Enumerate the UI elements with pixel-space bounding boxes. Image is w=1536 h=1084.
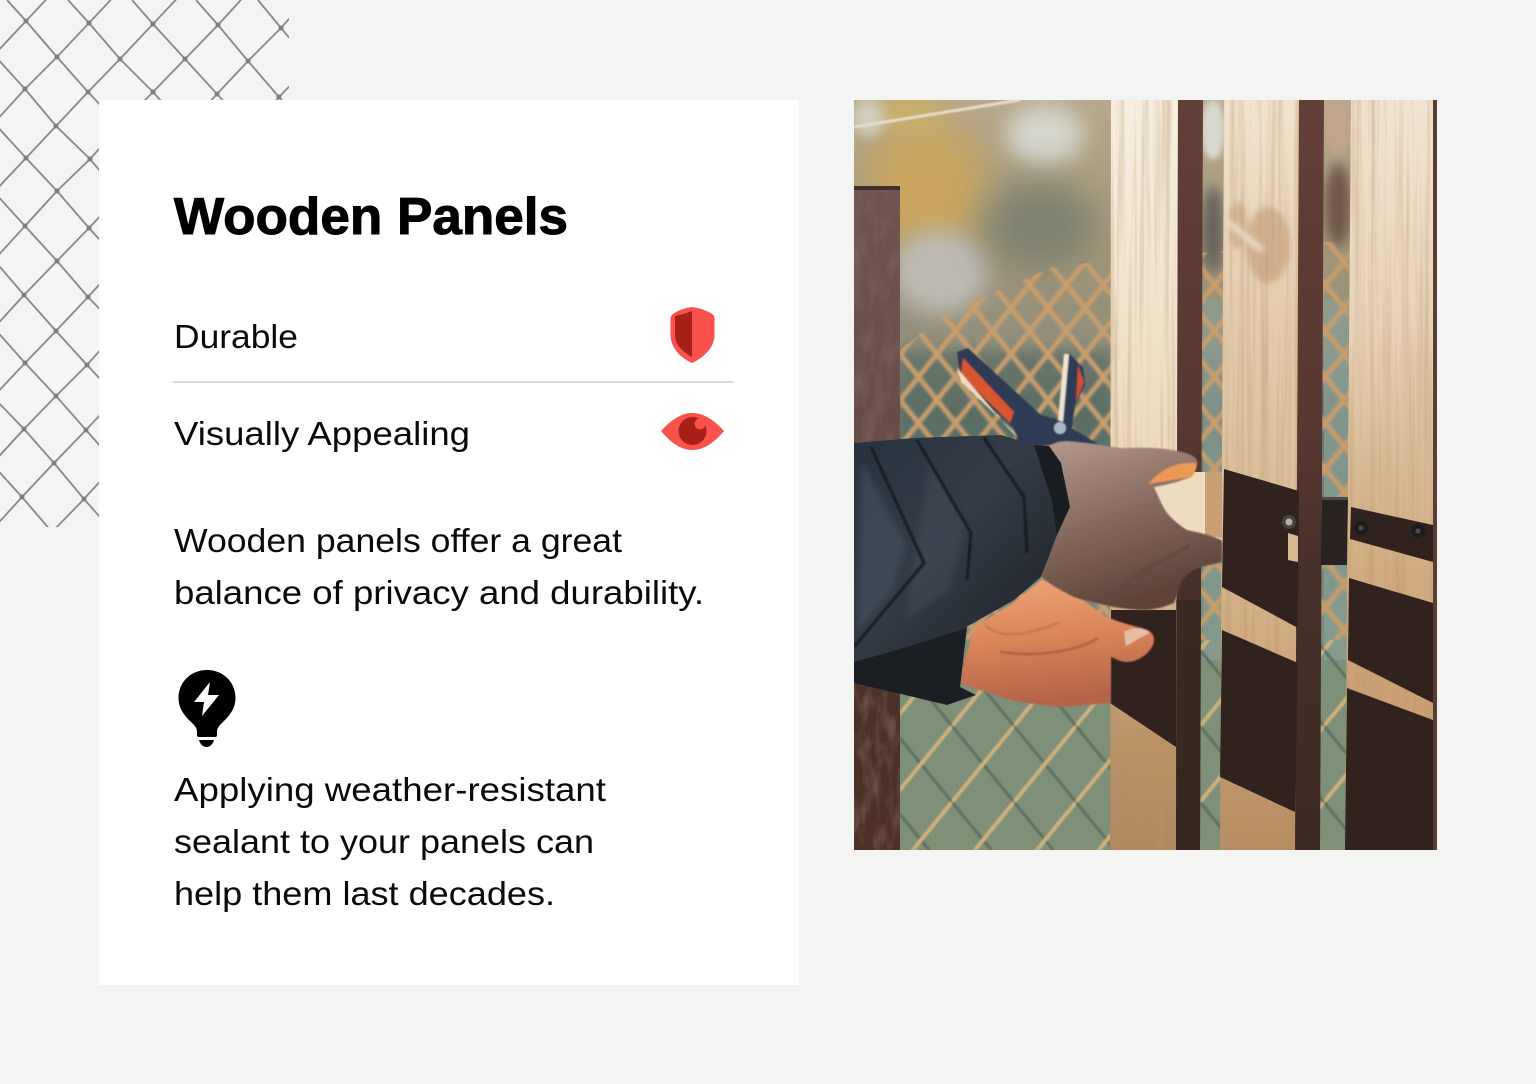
text block: tip bbox=[174, 771, 606, 912]
shadows on planks bbox=[1110, 469, 1433, 850]
clamp bbox=[957, 348, 1098, 446]
text block: description: Wooden panels offer a great bbox=[174, 522, 622, 559]
upper chain-link bbox=[900, 240, 1350, 640]
text block: tip: Applying weather-resistant bbox=[174, 771, 606, 808]
icon: eye bbox=[661, 413, 724, 450]
feature: durable bbox=[174, 307, 714, 363]
photo: hands fitting a wooden fence panel bbox=[852, 94, 1440, 850]
text block: description: balance of privacy and durability. bbox=[174, 574, 704, 611]
panel: text card bbox=[99, 100, 799, 985]
heading: Wooden Panels bbox=[174, 188, 568, 246]
jacket sleeve: upper bbox=[854, 435, 1070, 662]
chain-link fence pattern bbox=[0, 0, 310, 533]
bracket and screws bbox=[1282, 497, 1425, 565]
jacket sleeve: lower bbox=[854, 627, 976, 705]
wood grain bbox=[1110, 100, 1433, 644]
icon: shield bbox=[670, 307, 714, 363]
wire bbox=[854, 100, 1020, 127]
feature: visually appealing: Visually Appealing bbox=[174, 415, 470, 452]
feature: visually appealing bbox=[174, 413, 724, 452]
feature: durable: Durable bbox=[174, 318, 298, 355]
blurred background bbox=[854, 100, 1351, 850]
wood knot bbox=[1228, 201, 1290, 283]
icon: light bulb bbox=[178, 670, 236, 747]
text block: description bbox=[174, 522, 704, 611]
lower chain-link bbox=[900, 640, 1350, 850]
wooden planks and rails bbox=[1105, 100, 1440, 850]
wood block between fingers bbox=[1150, 472, 1222, 540]
text block: tip: sealant to your panels can bbox=[174, 823, 594, 860]
divider bbox=[173, 381, 733, 383]
lower hand bbox=[961, 580, 1154, 707]
metal post bbox=[854, 186, 900, 850]
lit patch beside screw bbox=[1288, 533, 1298, 562]
upper hand bbox=[1041, 441, 1222, 610]
text block: tip: help them last decades. bbox=[174, 875, 555, 912]
